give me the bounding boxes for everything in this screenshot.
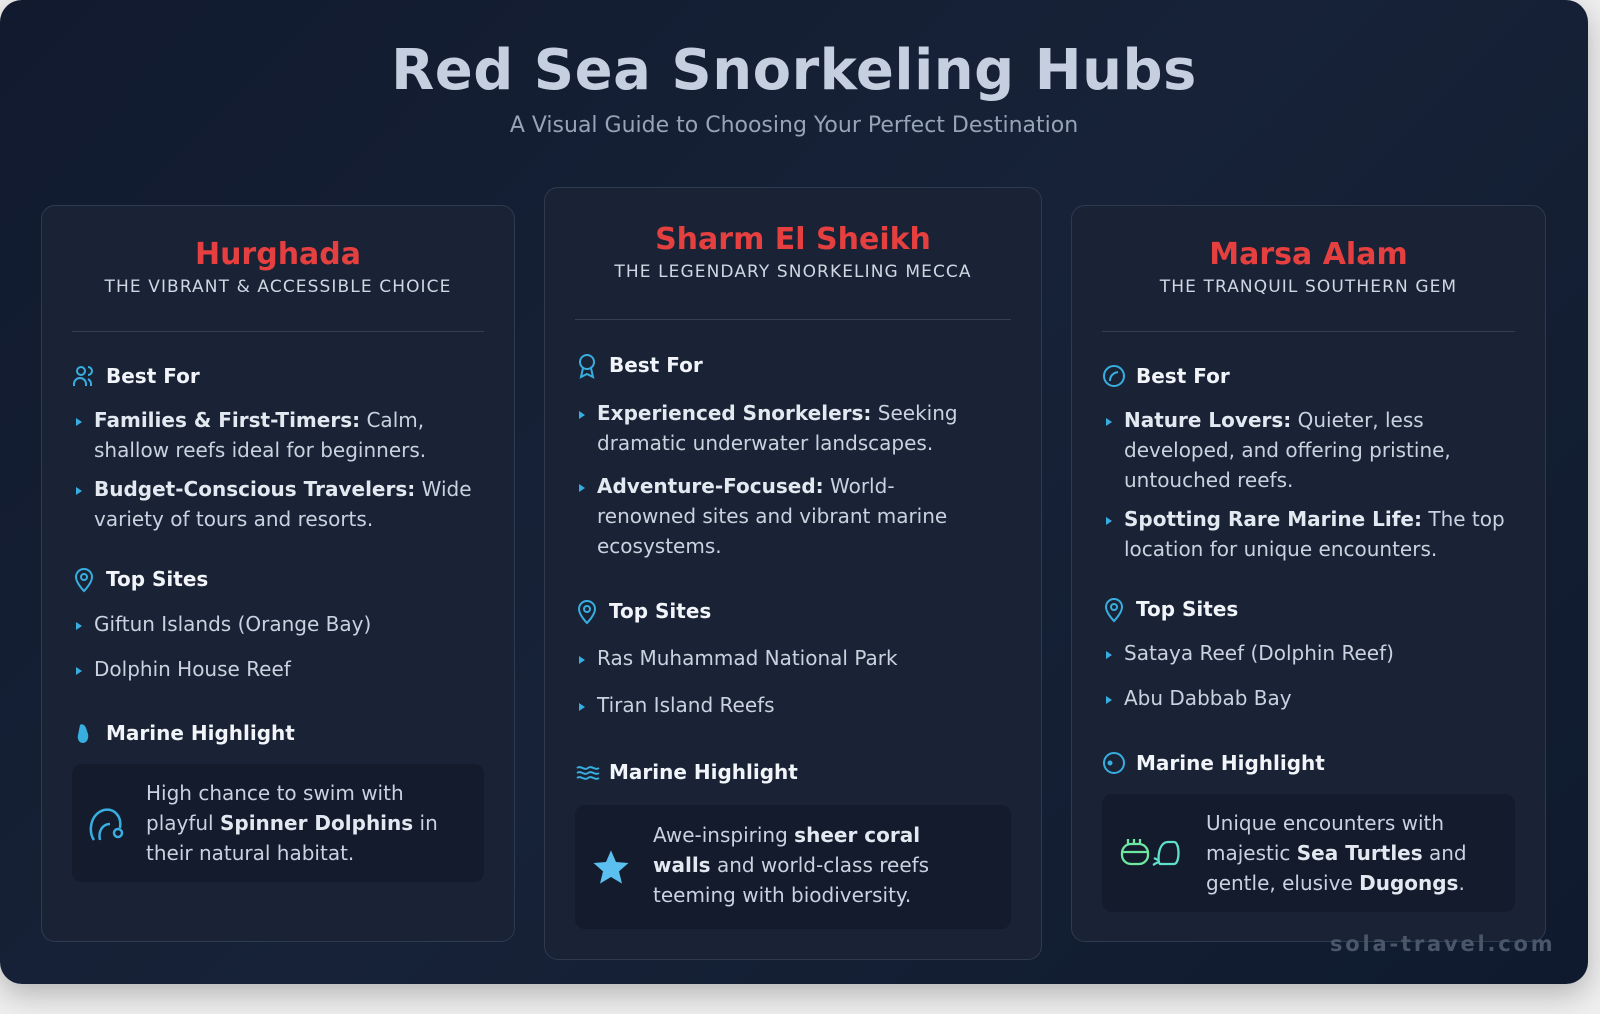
heading: Marine Highlight: Marine Highlight (1136, 751, 1325, 775)
callout: dolphins (72, 764, 484, 882)
name: Hurghada: Hurghada (195, 237, 361, 272)
panel: Hurghada (41, 205, 515, 942)
panel: Marsa Alam (1071, 205, 1546, 942)
heading: Top Sites: Top Sites (106, 567, 208, 591)
site list: Ras Muhammad National Park (597, 646, 898, 670)
heading: Best For: Best For (609, 353, 703, 377)
callout: dolphins: High chance to swim with playful Spinner Dolphins in their natural habitat. (146, 781, 438, 865)
heading: Top Sites: Top Sites (609, 599, 711, 623)
bullet: budget: Budget-Conscious Travelers: Wide variety of tours and resorts. (94, 477, 472, 531)
tagline: THE TRANQUIL SOUTHERN GEM (1160, 277, 1457, 297)
heading: Top Sites: Top Sites (1136, 597, 1238, 621)
heading: Best For: Best For (1136, 364, 1230, 388)
heading: Best For: Best For (106, 364, 200, 388)
bullet: adventure: Adventure-Focused: World-renowned sites and vibrant marine ecosystems. (597, 474, 947, 558)
heading: Best For (579, 353, 703, 379)
bullet: nature lovers: Nature Lovers: Quieter, less developed, and offering pristine, untouched reefs. (1124, 408, 1451, 492)
panel: Marsa Alam: Abu Dabbab Bay (1124, 686, 1292, 710)
icon: dolphin (90, 808, 124, 841)
tagline: THE VIBRANT & ACCESSIBLE CHOICE (104, 277, 451, 297)
watermark: sola-travel.com (1330, 932, 1555, 956)
callout: coral walls (575, 805, 1011, 929)
callout: turtles & dugongs: Unique encounters with majestic Sea Turtles and gentle, elusive Dugongs. (1206, 811, 1467, 895)
name: Marsa Alam: Marsa Alam (1209, 237, 1408, 272)
bullet: rare marine life: Spotting Rare Marine Life: The top location for unique encounters. (1124, 507, 1505, 561)
bullet: families: Families & First-Timers: Calm, shallow reefs ideal for beginners. (94, 408, 426, 462)
heading: Marine Highlight: Marine Highlight (609, 760, 798, 784)
panel: Sharm El Sheikh (544, 187, 1042, 960)
callout: coral walls: Awe-inspiring sheer coral walls and world-class reefs teeming with biodiversity. (653, 823, 929, 907)
bullet: experienced: Experienced Snorkelers: Seeking dramatic underwater landscapes. (597, 401, 958, 455)
title: Red Sea Snorkeling Hubs (391, 38, 1197, 103)
icon: star (594, 850, 628, 884)
panel: Sharm El Sheikh: Tiran Island Reefs (597, 693, 775, 717)
tagline: THE LEGENDARY SNORKELING MECCA (614, 262, 972, 282)
icon: turtle and dugong (1120, 839, 1180, 866)
callout: turtles & dugongs (1102, 794, 1515, 912)
name: Sharm El Sheikh: Sharm El Sheikh (655, 222, 931, 257)
site list: Giftun Islands (Orange Bay) (94, 612, 371, 636)
heading: Marine Highlight: Marine Highlight (106, 721, 295, 745)
site list: Sataya Reef (Dolphin Reef) (1124, 641, 1394, 665)
panel: Hurghada: Dolphin House Reef (94, 657, 291, 681)
subtitle: A Visual Guide to Choosing Your Perfect Destination (510, 113, 1078, 138)
